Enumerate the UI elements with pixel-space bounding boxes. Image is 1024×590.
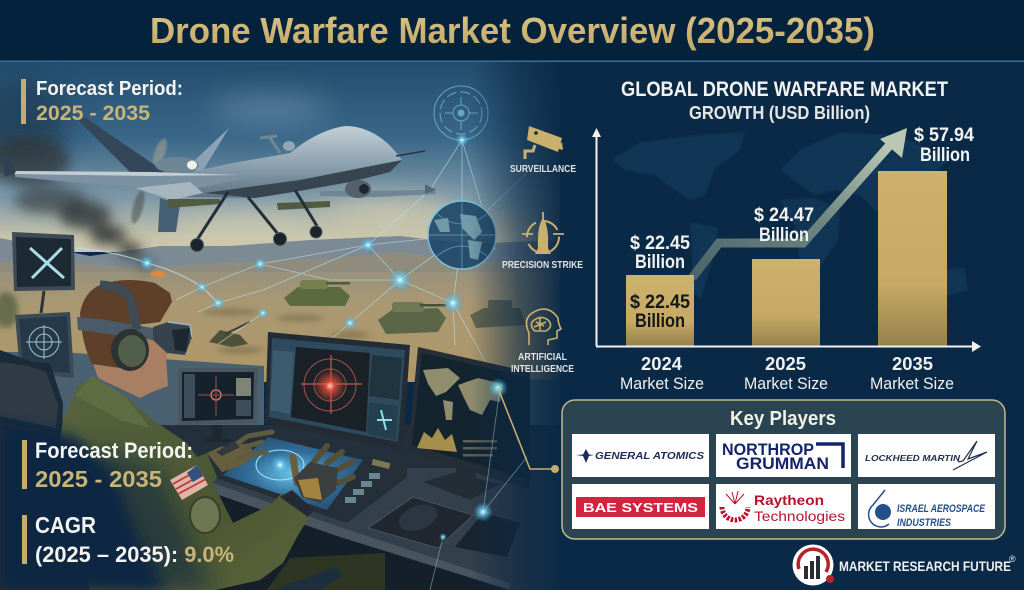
logo: Israel Aerospace Industries: INDUSTRIES [897, 517, 952, 529]
illustration: drone warfare scene [0, 62, 565, 590]
panel heading: Key Players [730, 408, 836, 430]
mountains [0, 236, 560, 290]
flag patch [170, 465, 208, 500]
thigh [267, 553, 385, 590]
rear props [129, 137, 169, 225]
brand logo: Market Research Future [792, 544, 1016, 586]
bar chart: market size [592, 125, 981, 393]
brand emblem [792, 544, 834, 586]
lower fin [158, 198, 180, 232]
chair [0, 350, 100, 590]
neck and face [92, 330, 172, 398]
logo: Northrop Grumman: GRUMMAN [736, 455, 829, 473]
value label 2024 [630, 233, 690, 273]
header band [0, 0, 1024, 62]
label: surveillance: SURVEILLANCE [510, 163, 576, 175]
monitor: drone silhouette [12, 232, 75, 313]
value label 2035: Billion [920, 145, 970, 166]
label: artificial intelligence: ARTIFICIAL [518, 351, 567, 363]
y arrowhead [592, 128, 601, 137]
smoke plume [0, 136, 152, 269]
headband [100, 285, 137, 330]
main wing [15, 171, 243, 190]
drone aircraft [2, 118, 436, 252]
logo: Northrop Grumman [716, 434, 851, 477]
desk items: mouse pad and mouse [368, 497, 520, 557]
v tail left [76, 118, 165, 174]
under-desk shadow [213, 488, 510, 590]
nose probe [396, 151, 425, 156]
label: precision strike: PRECISION STRIKE [502, 259, 583, 271]
bar 2025 [752, 259, 820, 347]
bottom forecast callout [22, 438, 193, 492]
value label 2035: $ 57.94 [914, 125, 974, 146]
tank 1 [284, 280, 350, 306]
x labels 2025: 2025 [765, 354, 806, 374]
bar value 2024 [630, 292, 690, 332]
logo: Northrop Grumman: NORTHROP [722, 441, 814, 459]
bar value 2024: Billion [635, 311, 685, 332]
logo: Raytheon Technologies: Raytheon [754, 492, 824, 508]
x arrowhead [972, 341, 981, 352]
desert scrub [0, 292, 370, 353]
clouds [0, 80, 460, 235]
logo: Lockheed Martin [858, 434, 995, 477]
landing gear [197, 190, 317, 240]
right glove [280, 446, 353, 517]
VR goggles [153, 322, 192, 355]
forecast years: 2025 - 2035 [36, 102, 150, 125]
chart heading: GROWTH (USD Billion) [689, 103, 870, 123]
chart heading [621, 78, 948, 123]
x labels 2024 [620, 354, 704, 393]
wing strut block [135, 182, 203, 200]
winglet [2, 155, 16, 177]
main tactical monitor [265, 332, 410, 450]
x labels 2025: Market Size [744, 374, 828, 393]
belly shadow [205, 160, 402, 198]
logo: BAE Systems [572, 484, 709, 529]
lower network lines [430, 388, 527, 590]
value label 2024: Billion [635, 252, 685, 273]
top forecast callout [21, 78, 183, 125]
sensor ball [345, 180, 371, 198]
monitor: radar [15, 312, 74, 378]
operator figure [60, 280, 385, 590]
logo: Israel Aerospace Industries [858, 484, 995, 529]
value label 2025: Billion [759, 225, 809, 246]
tank 3 [470, 300, 526, 328]
capability icons [502, 126, 583, 375]
logo: Raytheon Technologies: Technologies [754, 508, 845, 524]
artillery [209, 322, 250, 347]
background monitors [12, 232, 258, 442]
icon: surveillance camera [525, 126, 563, 159]
logo: General Atomics: GENERAL ATOMICS [595, 450, 704, 462]
logo: BAE Systems: BAE SYSTEMS [583, 500, 698, 515]
logo: Lockheed Martin: LOCKHEED MARTIN [865, 453, 961, 463]
panel: key players [562, 400, 1005, 539]
x labels 2024: Market Size [620, 374, 704, 393]
bar 2035 [878, 171, 947, 347]
logo: Raytheon Technologies [716, 484, 851, 529]
value label 2025: $ 24.47 [754, 205, 814, 226]
value label 2024: $ 22.45 [630, 233, 690, 254]
sky [0, 62, 560, 252]
right wing [320, 190, 436, 197]
x axis [596, 346, 975, 348]
v tail right [186, 128, 229, 172]
bar value 2024: $ 22.45 [630, 292, 690, 313]
chair armrest [273, 567, 344, 590]
left glove [207, 432, 272, 472]
fuselage [135, 126, 402, 198]
collar [75, 376, 150, 428]
desk front edge [213, 483, 510, 590]
wheels [190, 226, 322, 252]
world map monitor [408, 347, 530, 500]
tank 2 [378, 302, 446, 334]
control room wall [0, 352, 560, 590]
value label 2025 [754, 205, 814, 246]
icon: artificial intelligence head [526, 309, 561, 345]
ear cup [111, 329, 149, 371]
header rule [0, 60, 1024, 62]
soft shade over jacket [100, 445, 215, 590]
forecast years: 2025 - 2035 [35, 466, 162, 492]
shoulder patch [190, 497, 220, 533]
missiles [168, 199, 220, 208]
chart heading: GLOBAL DRONE WARFARE MARKET [621, 78, 948, 101]
monitor stand [423, 465, 500, 500]
antenna and dome [260, 136, 280, 153]
logo: General Atomics [572, 434, 709, 477]
x labels 2035: 2035 [892, 354, 933, 374]
y axis [596, 134, 598, 346]
registered mark: ® [1009, 554, 1016, 564]
holographic globe [428, 201, 496, 269]
title: Drone Warfare Market Overview (2025-2035) [150, 10, 875, 51]
hair [80, 280, 172, 368]
forecast label: Forecast Period: [35, 438, 193, 463]
network lines [74, 140, 530, 388]
CAGR value: (2025 – 2035): 9.0% [35, 542, 234, 567]
capability icons: INTELLIGENCE [511, 363, 574, 375]
headset strap [77, 317, 153, 340]
jacket [60, 378, 312, 590]
lower-left shade behind text [0, 422, 165, 590]
bar 2024 [626, 275, 694, 347]
holographic reticle [434, 86, 488, 140]
logo: Israel Aerospace Industries: ISRAEL AEROSPACE [897, 503, 986, 515]
monitor: target [178, 368, 258, 442]
x labels 2035: Market Size [870, 374, 954, 393]
growth arrow [692, 128, 907, 278]
glowing nodes [139, 133, 508, 541]
forecast label: Forecast Period: [36, 78, 183, 100]
connector to key players [498, 388, 559, 473]
wall shadow behind monitors [140, 425, 560, 590]
x labels 2035 [870, 354, 954, 393]
desert ground [0, 272, 560, 382]
touch console [213, 433, 407, 523]
small hud circle [489, 191, 507, 209]
CAGR label: CAGR [35, 512, 96, 538]
desk surface [205, 468, 560, 590]
x labels 2024: 2024 [641, 354, 682, 374]
icon: precision strike [522, 212, 564, 254]
value label 2035 [914, 125, 974, 166]
engine [155, 157, 199, 173]
x labels 2025 [744, 354, 828, 393]
fire [151, 270, 165, 278]
world map backdrop [612, 132, 968, 300]
tanks [209, 280, 526, 347]
CAGR callout [22, 512, 234, 567]
chair headrest [0, 362, 58, 428]
right edge fade [470, 62, 565, 590]
